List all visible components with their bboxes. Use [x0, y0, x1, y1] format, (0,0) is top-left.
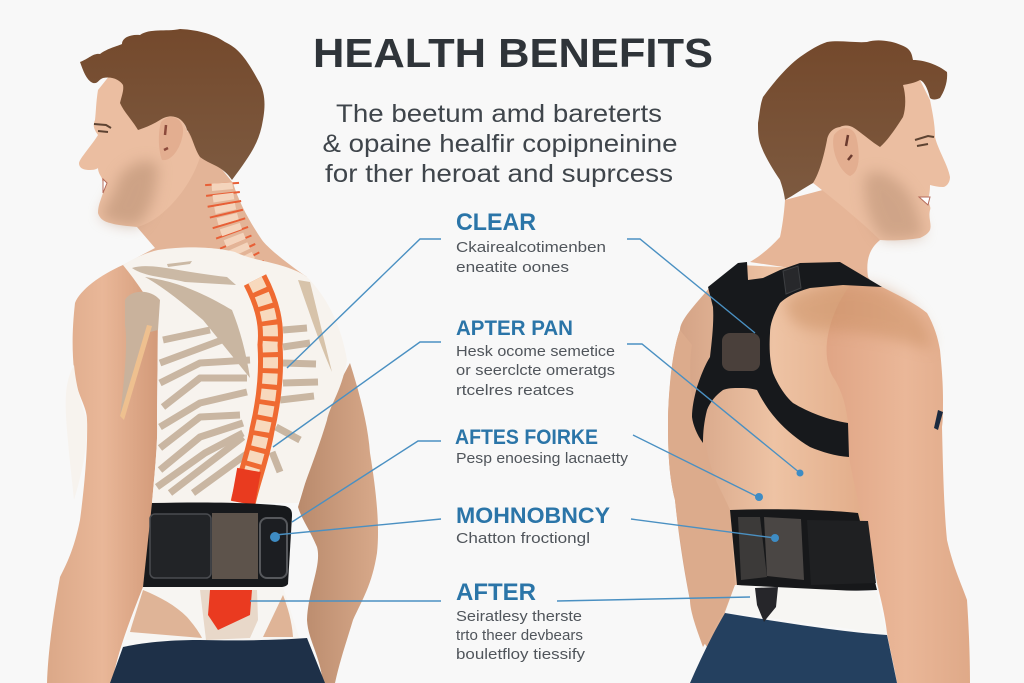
waist skin left	[130, 590, 202, 638]
neck	[750, 180, 880, 280]
brace buckle	[783, 266, 801, 294]
leader dots	[270, 470, 804, 542]
benefit: clear: eneatite oones	[456, 260, 569, 276]
benefit: after: trto theer devbears	[456, 628, 583, 644]
head	[813, 80, 950, 240]
thoracic spine	[243, 280, 271, 503]
left arm	[47, 265, 158, 683]
hair	[758, 40, 947, 200]
lumbar belt	[730, 509, 877, 591]
benefit: apter pan	[456, 317, 615, 399]
far arm shade	[668, 330, 735, 647]
benefit: after: AFTER	[456, 579, 536, 606]
lower back white shirt	[125, 587, 300, 640]
benefit: after: bouletfloy tiessify	[456, 647, 586, 663]
leader lines	[250, 239, 800, 601]
stubble shading	[100, 161, 158, 226]
benefit: mohnobncy: Chatton froctiongl	[456, 531, 590, 547]
belt buckle	[755, 587, 778, 622]
near-side torso	[668, 265, 880, 647]
benefit: after	[456, 579, 586, 663]
eye and brow	[94, 124, 111, 132]
subtitle: The beetum amd bareterts	[336, 100, 662, 128]
benefit: apter pan: rtcelres reatces	[456, 383, 574, 399]
ear	[833, 128, 859, 176]
brace pad	[722, 333, 760, 371]
neck vertebrae	[222, 183, 255, 280]
mouth	[103, 179, 107, 193]
subtitle: for ther heroat and suprcess	[325, 160, 673, 188]
hair	[80, 29, 264, 180]
upper shoulder bones	[132, 261, 236, 285]
skeleton overlay back panel	[123, 247, 347, 503]
pants	[690, 613, 897, 683]
shoulder blade	[145, 277, 250, 378]
waist skin right	[263, 595, 293, 637]
benefit: apter pan: or seerclcte omeratgs	[456, 363, 615, 379]
benefit: aftes foirke	[455, 426, 629, 467]
lumbar spine	[200, 590, 258, 640]
benefit: clear	[456, 209, 606, 276]
right shoulder blade	[298, 280, 332, 372]
neck and upper back skin	[123, 130, 307, 277]
pants	[110, 638, 325, 683]
benefit: apter pan: Hesk ocome semetice	[456, 344, 615, 360]
lumbar belt	[143, 502, 292, 587]
right figure: man wearing posture brace	[668, 40, 970, 683]
title: HEALTH BENEFITS	[313, 30, 713, 76]
benefit: aftes foirke: AFTES FOIRKE	[455, 426, 598, 449]
left figure: man with skeleton overlay	[47, 29, 378, 683]
peach bone on arm	[120, 325, 152, 420]
eye and brow	[915, 136, 934, 146]
near arm and shoulder	[827, 284, 970, 683]
benefit: mohnobncy: MOHNOBNCY	[456, 503, 610, 528]
freckled shoulder tone	[785, 284, 932, 350]
benefit: aftes foirke: Pesp enoesing lacnaetty	[456, 451, 629, 467]
subtitle	[322, 100, 678, 188]
benefit: clear: CLEAR	[456, 209, 536, 236]
benefit: mohnobncy	[456, 503, 610, 547]
benefit: after: Seiratlesy therste	[456, 609, 582, 625]
brace far strap	[934, 410, 943, 430]
shoulder joint	[120, 292, 160, 418]
subtitle: & opaine healfir copipneinine	[322, 130, 678, 158]
benefit: apter pan: APTER PAN	[456, 317, 573, 340]
far arm	[298, 363, 378, 683]
mouth	[919, 197, 930, 205]
posture brace	[692, 262, 882, 457]
ribs	[157, 328, 318, 493]
face	[79, 70, 200, 227]
benefit: clear: Ckairealcotimenben	[456, 240, 606, 256]
white panel outside arm	[66, 365, 87, 500]
white shirt	[725, 585, 887, 634]
stubble shading	[864, 172, 925, 239]
ear	[159, 117, 183, 160]
